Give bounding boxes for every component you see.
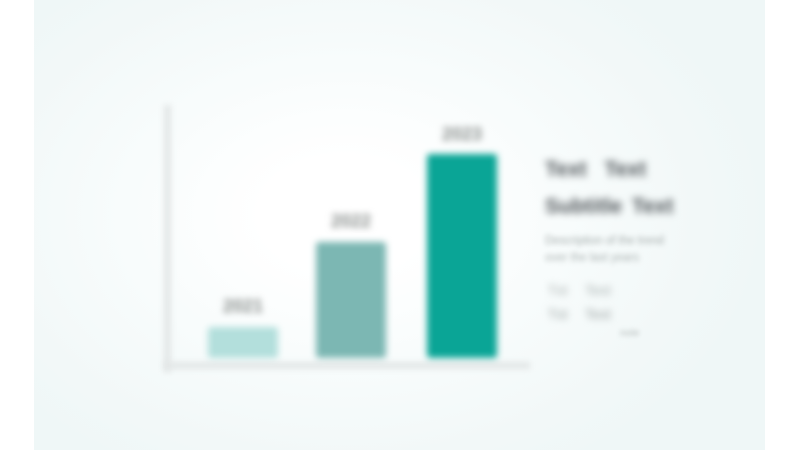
bar 2 label: 2022 — [331, 211, 371, 231]
bar 3 label: 2023 — [442, 124, 482, 144]
notes: Txt Text — [548, 282, 611, 298]
heading: Text Text — [545, 158, 646, 181]
notes: Txt Text — [548, 306, 611, 322]
notes: note — [620, 328, 639, 339]
heading: Subtitle Text — [545, 195, 673, 218]
x axis — [164, 362, 530, 369]
text block — [542, 156, 678, 339]
description — [544, 234, 666, 264]
bar 2 — [316, 242, 386, 358]
description: Description of the trend — [545, 235, 664, 247]
bar 3 — [427, 154, 497, 358]
bar chart — [162, 105, 530, 372]
notes — [548, 282, 640, 339]
bar 1 label: 2021 — [223, 296, 263, 316]
bar 1 — [208, 327, 278, 358]
y axis — [164, 105, 171, 372]
description: over the last years — [545, 252, 639, 264]
heading — [542, 156, 678, 218]
